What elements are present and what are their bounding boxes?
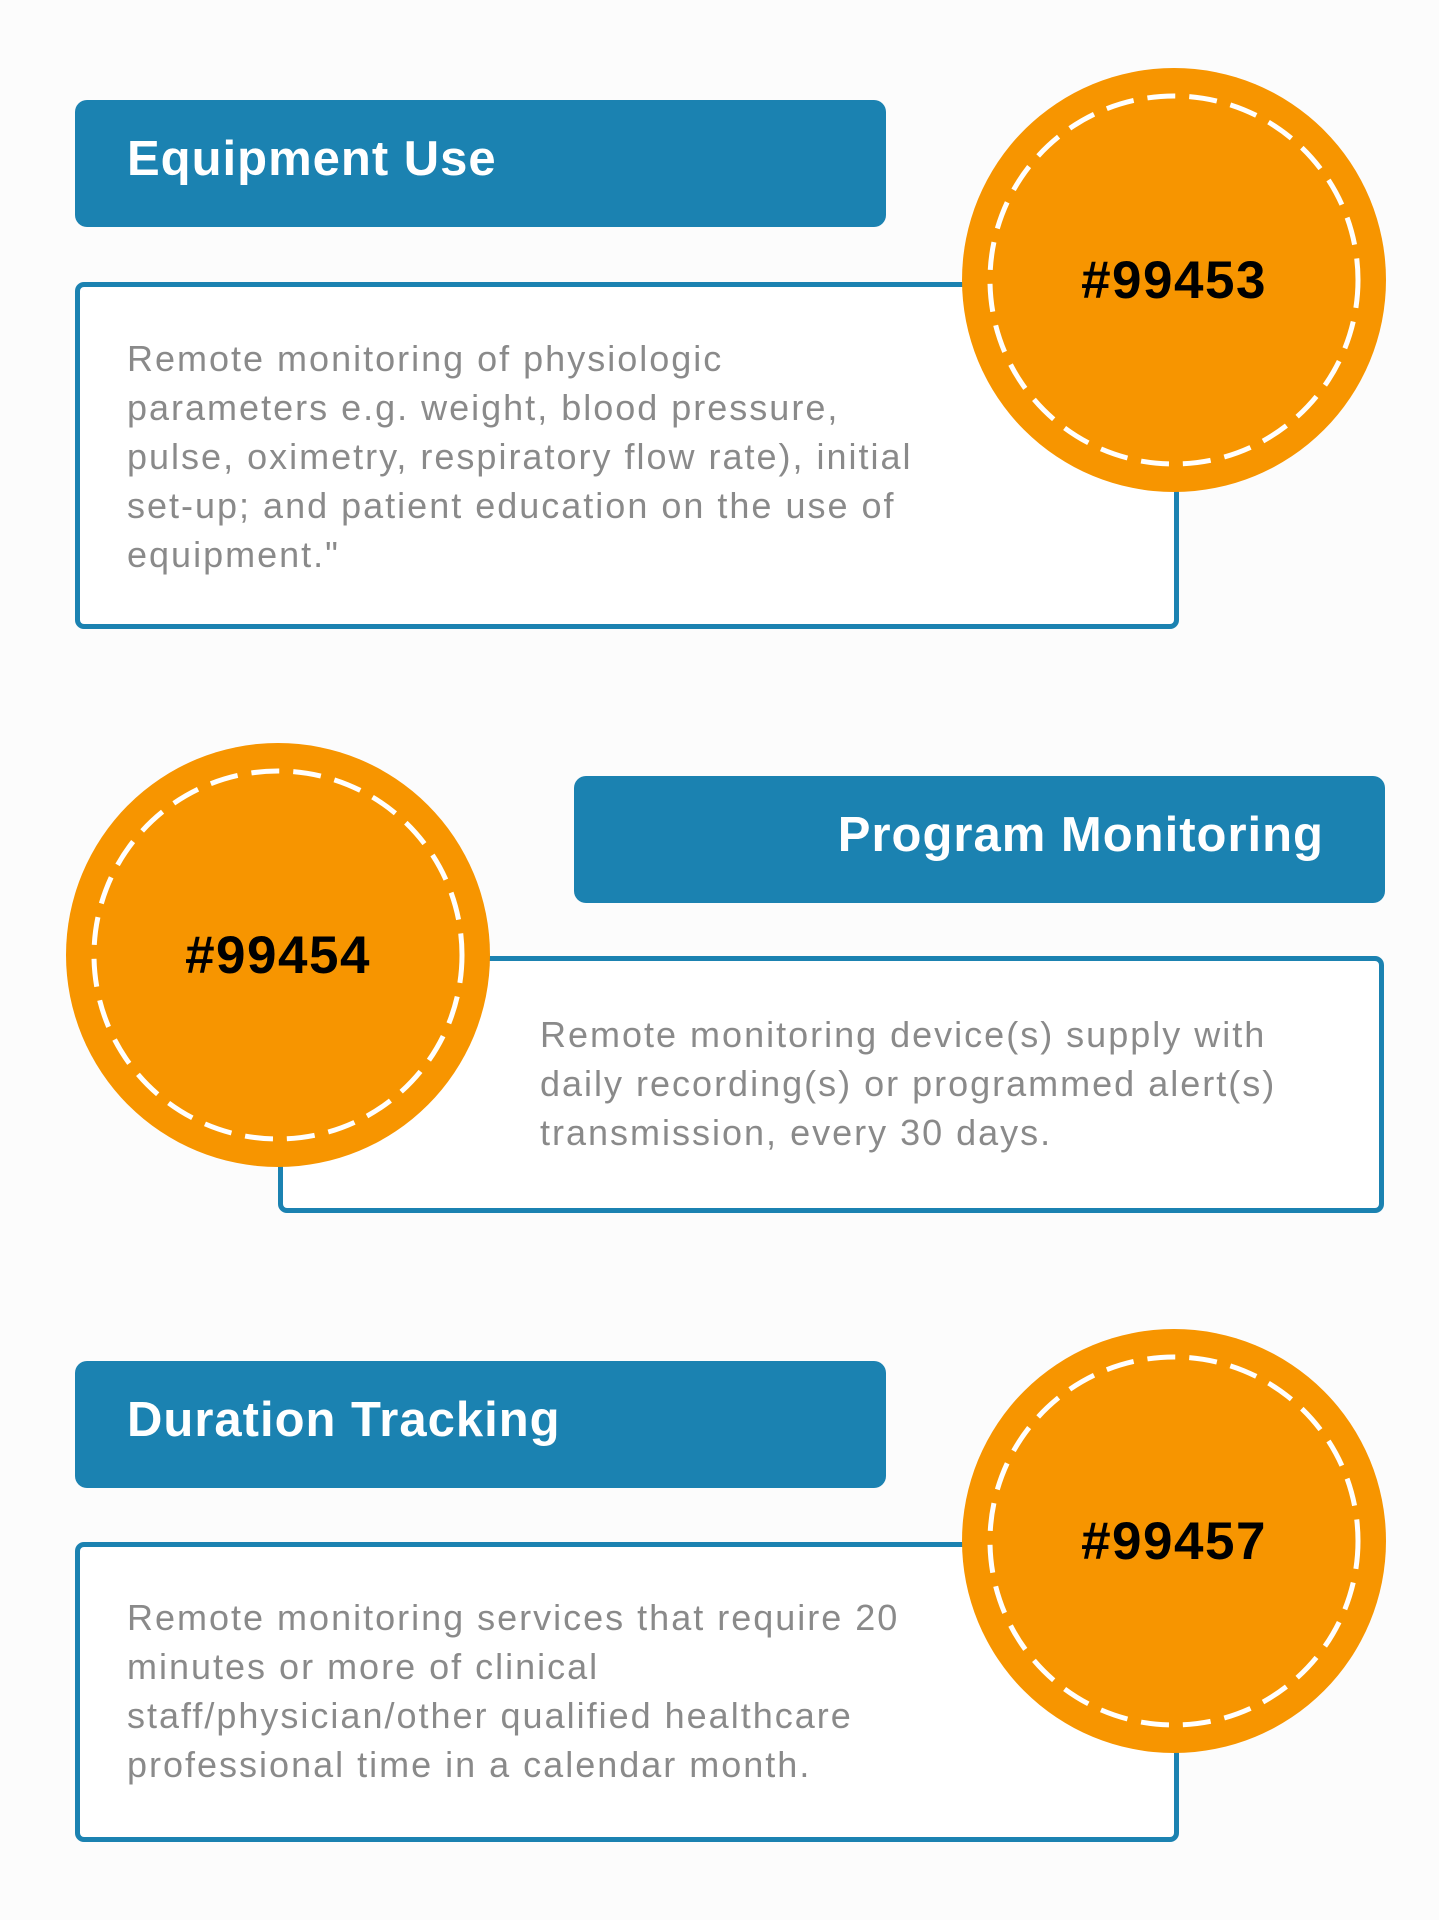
text box — [278, 956, 1384, 1213]
description text: daily recording(s) or programmed alert(s) — [540, 1063, 1276, 1104]
heading: Program Monitoring: Program Monitoring — [838, 808, 1324, 862]
description text: minutes or more of clinical — [127, 1646, 599, 1687]
heading: Program Monitoring — [574, 776, 1385, 903]
description text: transmission, every 30 days. — [540, 1112, 1052, 1153]
description text — [127, 1597, 899, 1785]
text box — [75, 1542, 1179, 1842]
heading: Duration Tracking: Duration Tracking — [127, 1393, 561, 1447]
text box — [75, 282, 1179, 629]
description text: equipment." — [127, 534, 340, 575]
badge: #99454: #99454 — [185, 926, 371, 985]
description text: parameters e.g. weight, blood pressure, — [127, 387, 839, 428]
badge: #99453 — [962, 68, 1386, 492]
badge: #99454 — [66, 743, 490, 1167]
heading: Duration Tracking — [75, 1361, 886, 1488]
description text — [540, 1014, 1276, 1153]
heading: Equipment Use: Equipment Use — [127, 132, 497, 186]
description text: pulse, oximetry, respiratory flow rate), initial — [127, 436, 913, 477]
panel: program monitoring — [66, 743, 1385, 1213]
heading: Equipment Use — [75, 100, 886, 227]
badge: #99457: #99457 — [1081, 1512, 1267, 1571]
badge: #99457 — [962, 1329, 1386, 1753]
panel: equipment use — [75, 68, 1386, 629]
description text: set-up; and patient education on the use of — [127, 485, 896, 526]
description text: professional time in a calendar month. — [127, 1744, 811, 1785]
badge: #99453: #99453 — [1081, 251, 1267, 310]
description text: Remote monitoring device(s) supply with — [540, 1014, 1266, 1055]
description text: staff/physician/other qualified healthcare — [127, 1695, 853, 1736]
description text: Remote monitoring services that require 20 — [127, 1597, 899, 1638]
panel: duration tracking — [75, 1329, 1386, 1842]
description text: Remote monitoring of physiologic — [127, 338, 723, 379]
description text — [127, 338, 913, 575]
